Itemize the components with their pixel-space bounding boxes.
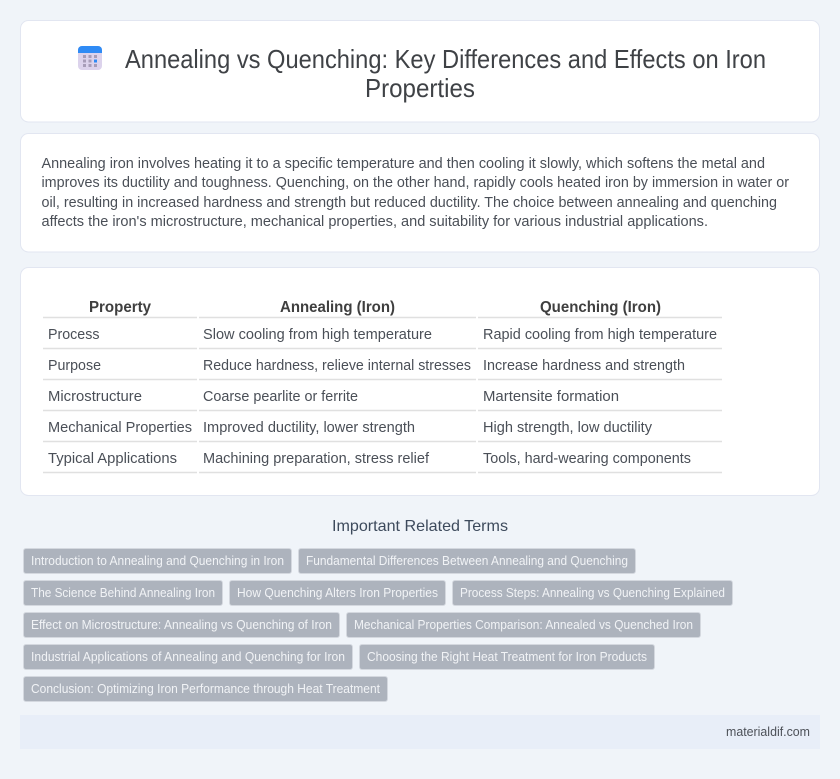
table row: process	[48, 327, 717, 343]
table row: microstructure: Coarse pearlite or ferrite	[203, 389, 358, 405]
table row: process: Rapid cooling from high temperature	[483, 327, 717, 343]
related term tags	[24, 548, 732, 702]
panel: description	[20, 134, 820, 252]
tag	[298, 548, 636, 574]
tag	[346, 612, 700, 638]
tag	[230, 580, 446, 606]
tag: Fundamental Differences Between Annealing and Quenching	[306, 554, 628, 568]
title: Annealing vs Quenching: Key Differences and Effects on Iron	[125, 46, 766, 74]
table row: mechanical properties: High strength, low ductility	[483, 420, 653, 436]
table header	[89, 299, 661, 316]
text block: description: Annealing iron involves heating it to a specific temperature and then cooling it slowly, which softens the metal and	[42, 156, 765, 172]
tag: Conclusion: Optimizing Iron Performance through Heat Treatment	[31, 682, 380, 696]
icon: calendar	[78, 46, 102, 70]
table row: typical applications	[48, 451, 691, 467]
table header: Annealing (Iron)	[280, 299, 395, 316]
panel: comparison table	[20, 268, 820, 496]
text block: description: affects the iron's microstructure, mechanical properties, and suitability for various industrial applications.	[42, 214, 708, 230]
table row: purpose: Reduce hardness, relieve internal stresses	[203, 358, 471, 374]
panel: header	[20, 20, 820, 122]
table row: process: Process	[48, 327, 100, 343]
table row: mechanical properties: Mechanical Properties	[48, 420, 192, 436]
table row: typical applications: Machining preparation, stress relief	[203, 451, 430, 467]
tag	[24, 612, 340, 638]
table row: typical applications: Typical Applications	[48, 451, 177, 467]
table rules	[43, 318, 722, 472]
tag: Process Steps: Annealing vs Quenching Explained	[460, 586, 725, 600]
table row: typical applications: Tools, hard-wearing components	[483, 451, 691, 467]
table row: microstructure	[48, 389, 619, 405]
heading: related terms: Important Related Terms	[332, 518, 508, 535]
tag	[360, 644, 654, 670]
title: Properties	[365, 75, 475, 103]
table row: mechanical properties: Improved ductility, lower strength	[203, 420, 415, 436]
table row: purpose: Purpose	[48, 358, 101, 374]
tag: How Quenching Alters Iron Properties	[237, 586, 438, 600]
tag: Industrial Applications of Annealing and Quenching for Iron	[31, 650, 345, 664]
tag: Mechanical Properties Comparison: Annealed vs Quenched Iron	[354, 618, 693, 632]
table header: Quenching (Iron)	[540, 299, 661, 316]
table row: purpose: Increase hardness and strength	[483, 358, 685, 374]
tag	[452, 580, 732, 606]
table row: mechanical properties	[48, 420, 653, 436]
title	[125, 46, 766, 103]
text block: description	[42, 156, 789, 230]
tag	[24, 644, 352, 670]
tag: Effect on Microstructure: Annealing vs Quenching of Iron	[31, 618, 332, 632]
tag	[24, 676, 388, 702]
table header: Property	[89, 299, 151, 316]
tag: The Science Behind Annealing Iron	[31, 586, 215, 600]
tag: Choosing the Right Heat Treatment for Iron Products	[367, 650, 647, 664]
tag	[24, 580, 222, 606]
tag: Introduction to Annealing and Quenching in Iron	[31, 554, 284, 568]
footer	[20, 715, 820, 749]
table row: process: Slow cooling from high temperature	[203, 327, 432, 343]
table row: microstructure: Microstructure	[48, 389, 142, 405]
footer: materialdif.com	[726, 725, 810, 739]
text block: description: oil, resulting in increased hardness and strength but reduced ductility. The choice between annealing and quenching	[42, 195, 777, 211]
text block: description: improves its ductility and toughness. Quenching, on the other hand, rapidly cools heated iron by immersion in water or	[42, 175, 789, 191]
table row: purpose	[48, 358, 685, 374]
tag	[24, 548, 292, 574]
table row: microstructure: Martensite formation	[483, 389, 619, 405]
